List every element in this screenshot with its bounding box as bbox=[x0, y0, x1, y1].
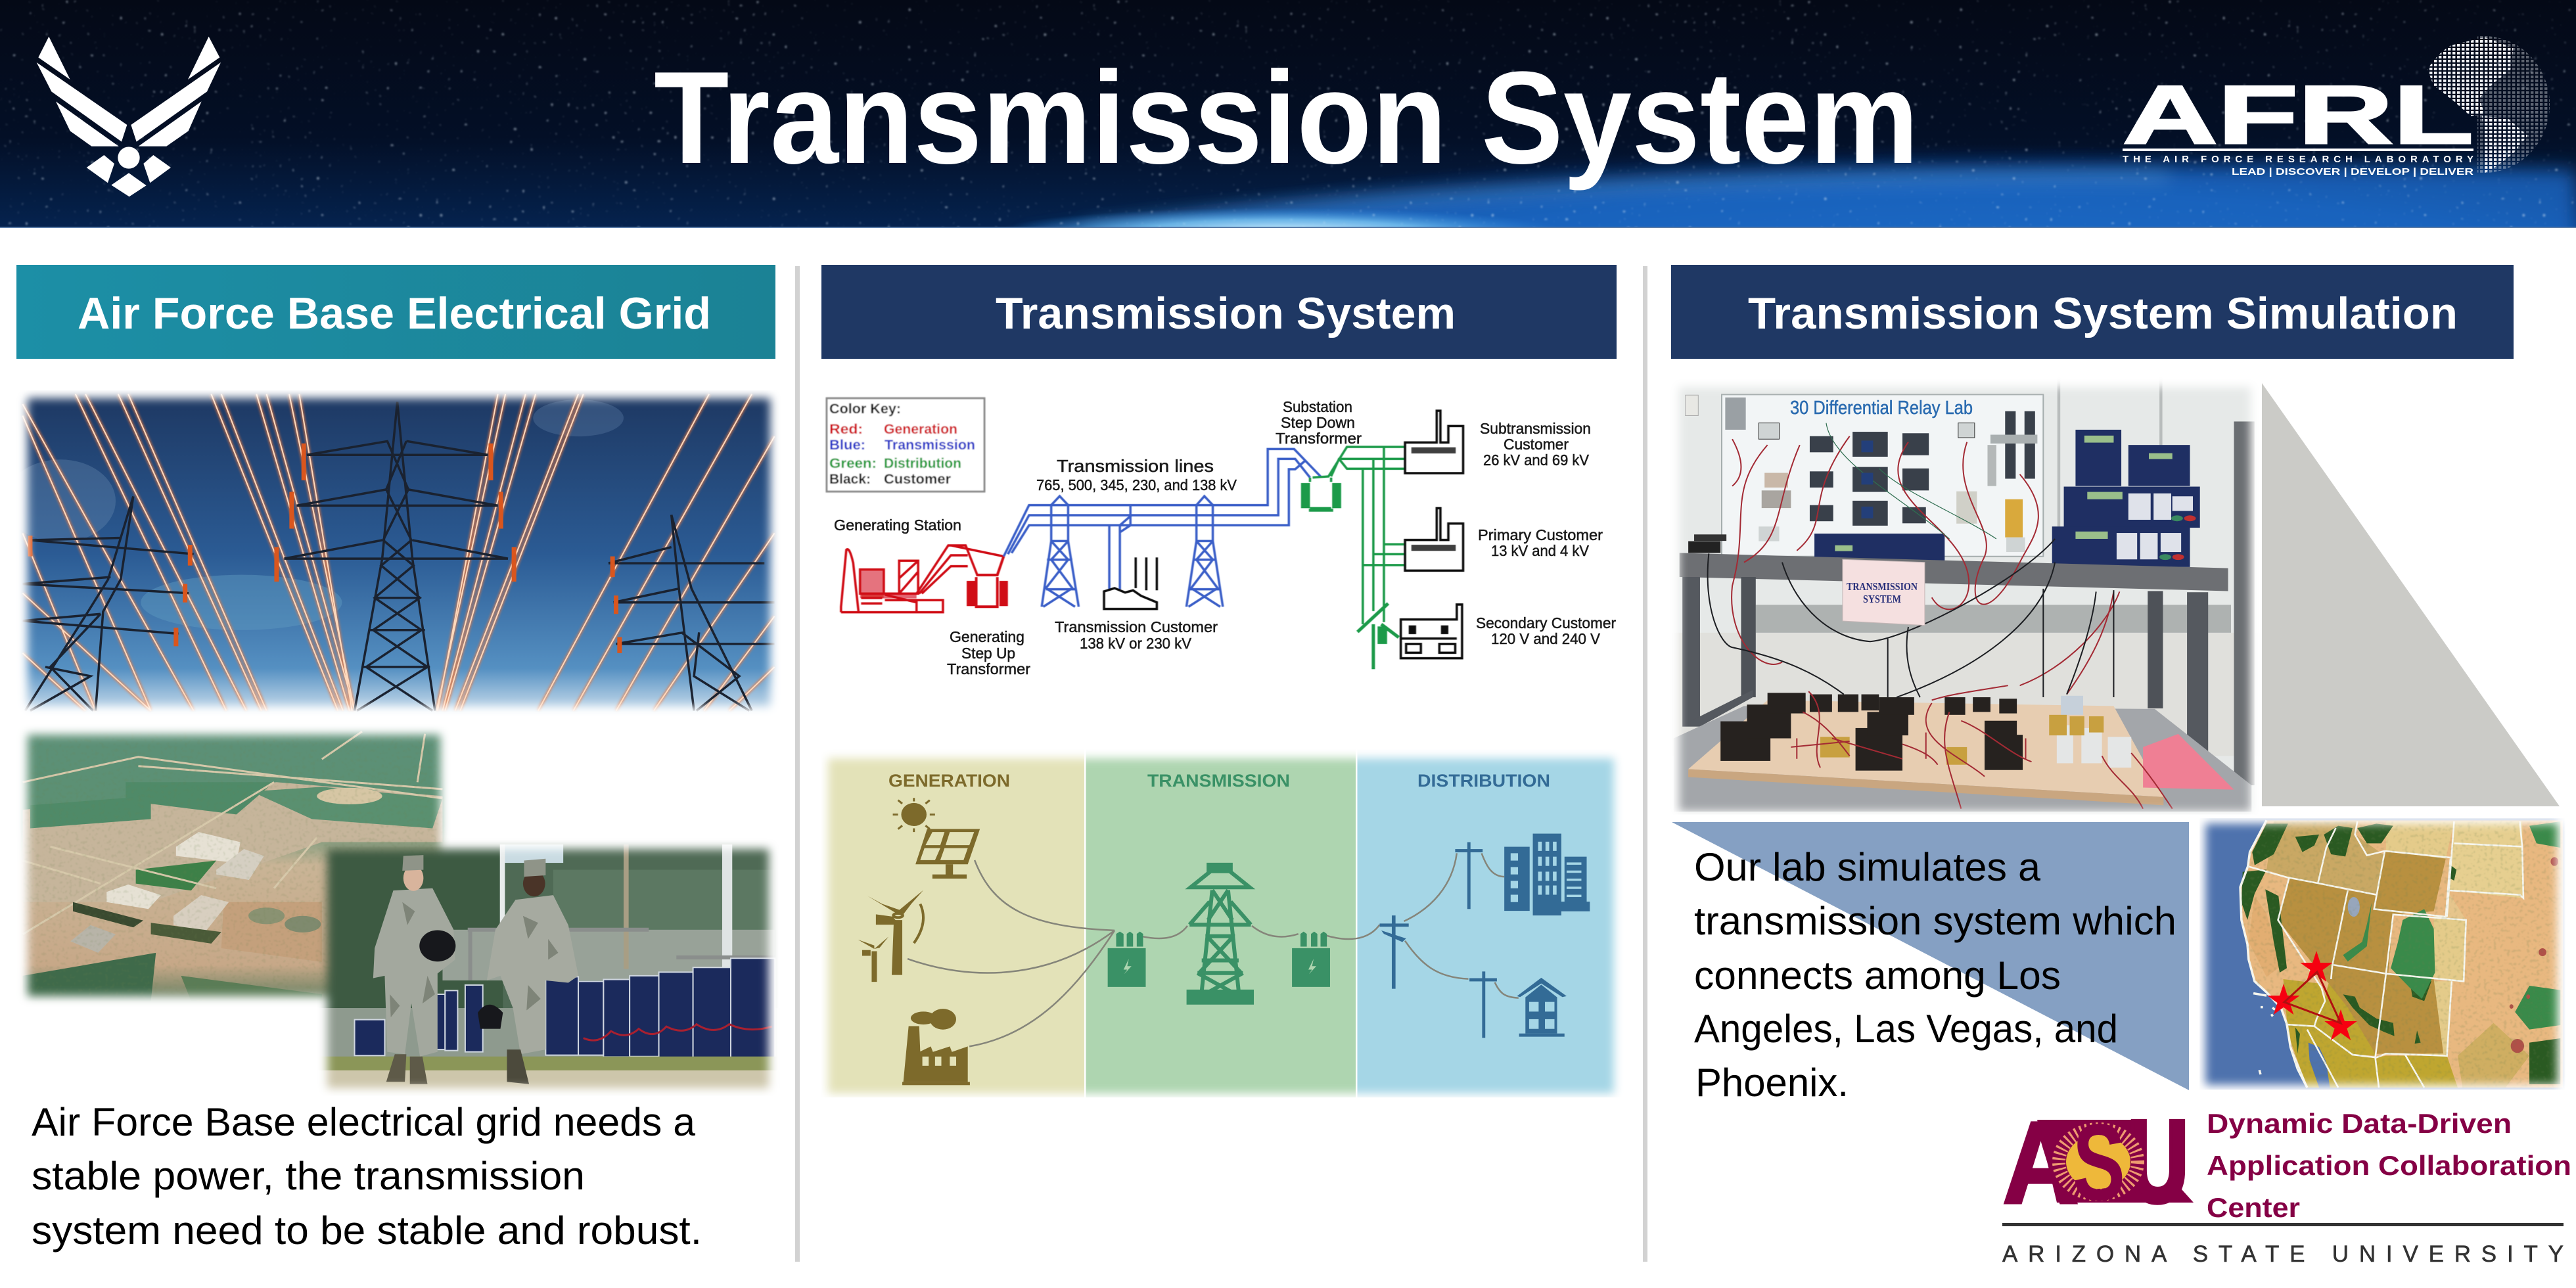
card: transmission system bbox=[1843, 559, 1925, 626]
color key legend: Customer bbox=[884, 472, 951, 487]
text: lab simulates a transmission system: Our lab simulates a bbox=[1694, 845, 2041, 889]
chart: generation transmission distribution: TRANSMISSION bbox=[1147, 771, 1290, 791]
diagram labels: 26 kV and 69 kV bbox=[1483, 451, 1590, 469]
diagram labels: Primary Customer bbox=[1478, 526, 1603, 543]
logo: Arizona State University: ARIZONA STATE UNIVERSITY bbox=[2002, 1241, 2564, 1267]
heading: Transmission System Simulation: Transmission System Simulation bbox=[1748, 288, 2458, 338]
diagram labels: 13 kV and 4 kV bbox=[1491, 542, 1590, 559]
logo: AFRL: THE AIR FORCE RESEARCH LABORATORY bbox=[2123, 154, 2473, 165]
chart: generation transmission distribution: DISTRIBUTION bbox=[1417, 771, 1550, 791]
panel: Transmission System Simulation bbox=[1668, 265, 2571, 1267]
diagram labels: Substation bbox=[1283, 398, 1352, 415]
panel: Transmission System bbox=[821, 265, 1626, 1097]
photo: aerial view of base bbox=[15, 722, 453, 1008]
photo: differential relay lab bench bbox=[1668, 377, 2261, 815]
text: lab simulates a transmission system: Angeles, Las Vegas, and bbox=[1694, 1007, 2118, 1051]
text: lab simulates a transmission system: transmission system which bbox=[1694, 899, 2176, 943]
airman left bbox=[373, 855, 455, 1084]
heading: Transmission System Simulation bbox=[1671, 265, 2514, 359]
color key legend: Color Key: bbox=[829, 402, 901, 417]
diagram labels: Subtransmission bbox=[1480, 420, 1591, 437]
chart: generation transmission distribution: GENERATION bbox=[888, 771, 1010, 791]
chart: power grid one-line diagram bbox=[827, 398, 1616, 678]
color key legend: Blue: bbox=[829, 438, 865, 453]
text: grid needs stable power: stable power, the transmission bbox=[32, 1154, 585, 1198]
network drawing bbox=[841, 411, 1463, 669]
logo: Arizona State University: U bbox=[2128, 1097, 2188, 1226]
photo: glowing power lines and pylons bbox=[5, 390, 785, 718]
heading: Transmission System bbox=[821, 265, 1617, 359]
diagram labels: Step Up bbox=[961, 645, 1015, 662]
color key legend: Distribution bbox=[884, 456, 961, 471]
logo: AFRL bbox=[2123, 33, 2553, 177]
icon: substation transformers bbox=[1108, 932, 1330, 987]
diagram labels: Transformer bbox=[1276, 430, 1362, 447]
color key legend: Red: bbox=[829, 422, 863, 437]
color key legend: Green: bbox=[829, 456, 877, 471]
text: Dynamic Data-Driven Application Collaboration Center bbox=[2207, 1108, 2571, 1223]
text: lab simulates a transmission system: connects among Los bbox=[1694, 954, 2061, 998]
logo: Arizona State University: A bbox=[2003, 1099, 2079, 1228]
diagram labels: Customer bbox=[1504, 436, 1569, 453]
diagram labels: 765, 500, 345, 230, and 138 kV bbox=[1036, 476, 1237, 494]
color key legend: Generation bbox=[884, 422, 957, 437]
panel: Air Force Base Electrical Grid bbox=[5, 265, 785, 1253]
header banner bbox=[0, 0, 2576, 228]
photo: differential relay lab bench: SYSTEM bbox=[1863, 593, 1901, 605]
text: grid needs stable power: Air Force Base electrical grid needs a bbox=[32, 1100, 696, 1144]
photo: airmen walking past solar panels bbox=[317, 837, 779, 1095]
photo: differential relay lab bench: 30 Differential Relay Lab bbox=[1790, 398, 1973, 419]
text: grid needs stable power: system need to be stable and robust. bbox=[32, 1208, 702, 1253]
diagram labels: Transformer bbox=[947, 660, 1030, 678]
icon: solar panel bbox=[893, 798, 980, 879]
text: lab simulates a transmission system: Phoenix. bbox=[1695, 1061, 1849, 1105]
map: western United States with three cities bbox=[2199, 818, 2565, 1090]
logo: AFRL: AFRL bbox=[2123, 68, 2473, 161]
chart: generation transmission distribution bbox=[821, 749, 1626, 1097]
text: Dynamic Data-Driven Application Collaboration Center: Dynamic Data-Driven bbox=[2207, 1108, 2512, 1139]
color key legend: Transmission bbox=[885, 438, 975, 453]
diagram labels: Transmission Customer bbox=[1055, 618, 1218, 635]
diagram labels bbox=[834, 398, 1616, 678]
color key legend bbox=[827, 398, 984, 492]
diagram labels: 120 V and 240 V bbox=[1491, 630, 1601, 647]
heading: Air Force Base Electrical Grid bbox=[16, 265, 775, 359]
logo: Arizona State University bbox=[2002, 1097, 2564, 1267]
icon: wind turbines bbox=[858, 890, 923, 982]
text: lab simulates a transmission system bbox=[1694, 845, 2176, 1105]
photo: differential relay lab bench: TRANSMISSION bbox=[1847, 580, 1918, 593]
diagram labels: 138 kV or 230 kV bbox=[1080, 635, 1192, 652]
title: Transmission System bbox=[654, 45, 1919, 191]
decorative gray triangle bbox=[2262, 383, 2560, 806]
heading: Air Force Base Electrical Grid: Air Force Base Electrical Grid bbox=[78, 288, 711, 338]
wires bbox=[908, 853, 1519, 1046]
heading: Transmission System: Transmission System bbox=[996, 288, 1456, 338]
text: grid needs stable power bbox=[32, 1100, 702, 1253]
icon: poles and buildings bbox=[1379, 834, 1590, 1038]
icon: factory bbox=[902, 1009, 970, 1085]
diagram labels: Generating Station bbox=[834, 517, 961, 534]
icon: transmission tower bbox=[1189, 865, 1252, 1003]
color key legend: Black: bbox=[829, 472, 871, 487]
diagram labels: Transmission lines bbox=[1057, 456, 1214, 476]
text: Dynamic Data-Driven Application Collaboration Center: Center bbox=[2207, 1192, 2300, 1223]
text: Dynamic Data-Driven Application Collaboration Center: Application Collaboration bbox=[2207, 1150, 2571, 1181]
diagram labels: Secondary Customer bbox=[1476, 614, 1616, 632]
diagram labels: Generating bbox=[950, 628, 1024, 645]
decorative blue triangle bbox=[1672, 822, 2189, 1090]
diagram labels: Step Down bbox=[1281, 414, 1355, 431]
logo: AFRL: LEAD | DISCOVER | DEVELOP | DELIVER bbox=[2232, 166, 2473, 177]
icon: Air Force wings emblem bbox=[37, 37, 221, 196]
airman right bbox=[478, 859, 578, 1084]
logo: Arizona State University: S bbox=[2073, 1102, 2125, 1224]
